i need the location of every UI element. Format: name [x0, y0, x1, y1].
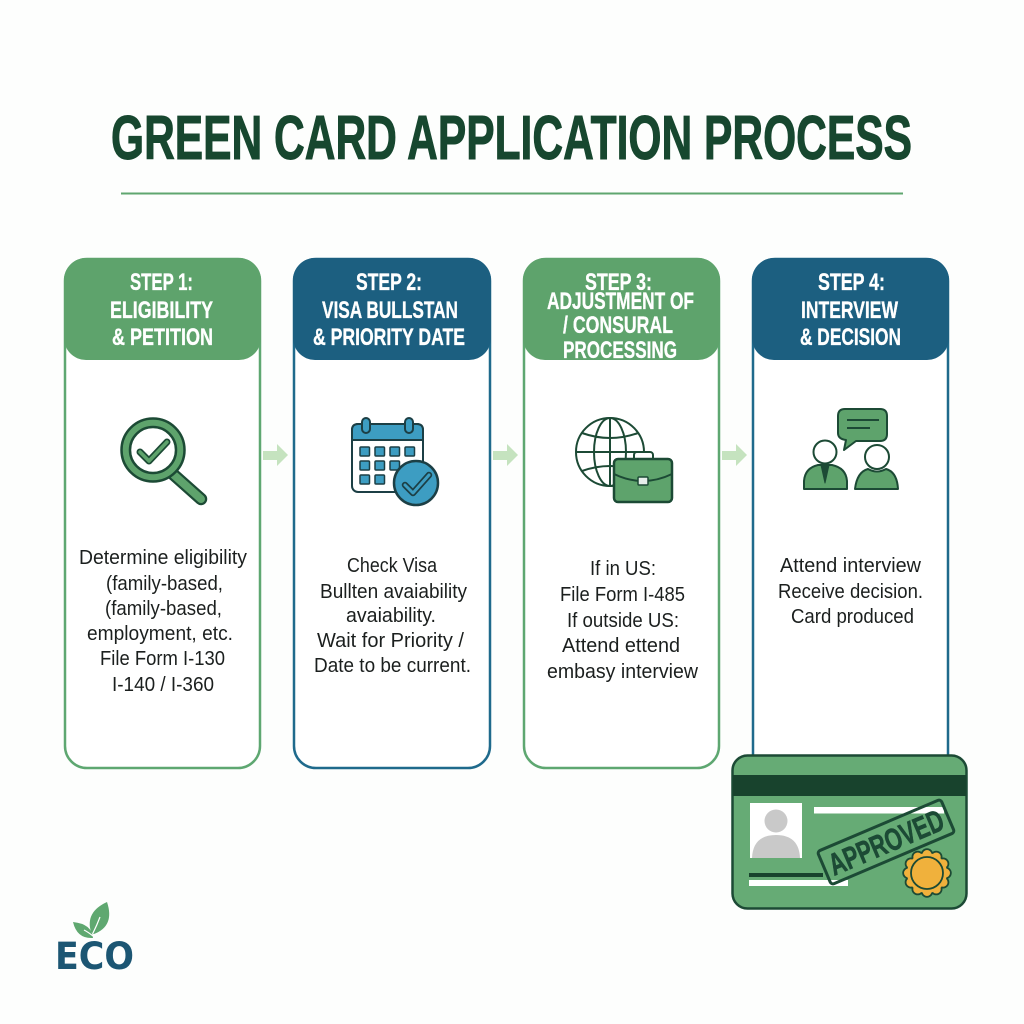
step 3 header: [523, 258, 720, 364]
step 4 text: Receive decision.: [778, 581, 923, 603]
approved stamp: [817, 799, 955, 885]
step 2 text: avaiability.: [346, 605, 436, 627]
icon: calendar with check: [352, 418, 438, 505]
step 2 text: Wait for Priority /: [317, 630, 464, 652]
arrow 2 to 3: [493, 444, 518, 466]
id photo: [750, 803, 802, 858]
step 3 header: STEP 3:: [585, 269, 652, 296]
step 1 text: [79, 547, 247, 696]
step 3 text: Attend ettend: [562, 635, 680, 657]
step 3 text: If in US:: [590, 558, 656, 580]
step 3 text: embasy interview: [547, 661, 699, 683]
step 1 header: ELIGIBILITY: [110, 297, 213, 324]
step 2 header: & PRIORITY DATE: [313, 324, 465, 351]
step 1 text: (family-based,: [105, 598, 222, 620]
step 4 text: Attend interview: [780, 555, 922, 577]
step 3 header: / CONSURAL: [563, 312, 673, 339]
step 4 text: [778, 555, 923, 628]
icon: interview people with speech bubble: [804, 409, 898, 489]
step 3 header: PROCESSING: [563, 337, 677, 364]
step 2 text: Date to be current.: [314, 655, 471, 677]
step 1 text: employment, etc.: [87, 623, 233, 645]
step 3 header: ADJUSTMENT OF: [547, 288, 694, 315]
step 4 header: STEP 4:: [818, 269, 885, 296]
panel: step 1: [64, 258, 261, 768]
step 2 header: [293, 258, 491, 360]
arrow 3 to 4: [722, 444, 747, 466]
gold seal: [903, 849, 951, 897]
step 1 text: File Form I-130: [100, 648, 225, 670]
icon: globe and briefcase: [576, 418, 672, 502]
step 3 text: If outside US:: [567, 610, 679, 632]
panel: step 2: [293, 258, 491, 768]
approved stamp: APPROVED: [823, 803, 949, 882]
step 2 text: [314, 555, 471, 677]
step 4 header: & DECISION: [800, 324, 901, 351]
step 1 text: (family-based,: [106, 573, 223, 595]
arrow 1 to 2: [263, 444, 288, 466]
step 1 header: [64, 258, 261, 360]
panel: step 3: [523, 258, 720, 768]
step 2 header: VISA BULLSTAN: [322, 297, 458, 324]
step 1 header: STEP 1:: [130, 269, 193, 296]
step 4 header: INTERVIEW: [801, 297, 898, 324]
step 3 text: File Form I-485: [560, 584, 685, 606]
panel: step 4: [752, 258, 949, 779]
step 2 header: STEP 2:: [356, 269, 422, 296]
step 3 text: [547, 558, 699, 683]
logo: ECO: [55, 902, 134, 978]
logo leaves: [73, 902, 109, 938]
icon: magnifier with check: [122, 418, 201, 499]
logo: ECO: ECO: [55, 935, 134, 978]
step 2 text: Bullten avaiability: [320, 581, 467, 603]
step 2 text: Check Visa: [347, 555, 438, 577]
step 1 header: & PETITION: [112, 324, 213, 351]
approved green card: [732, 756, 966, 908]
step 4 text: Card produced: [791, 606, 914, 628]
step 1 text: Determine eligibility: [79, 547, 247, 569]
step 1 text: I-140 / I-360: [112, 674, 214, 696]
step 4 header: [752, 258, 949, 360]
